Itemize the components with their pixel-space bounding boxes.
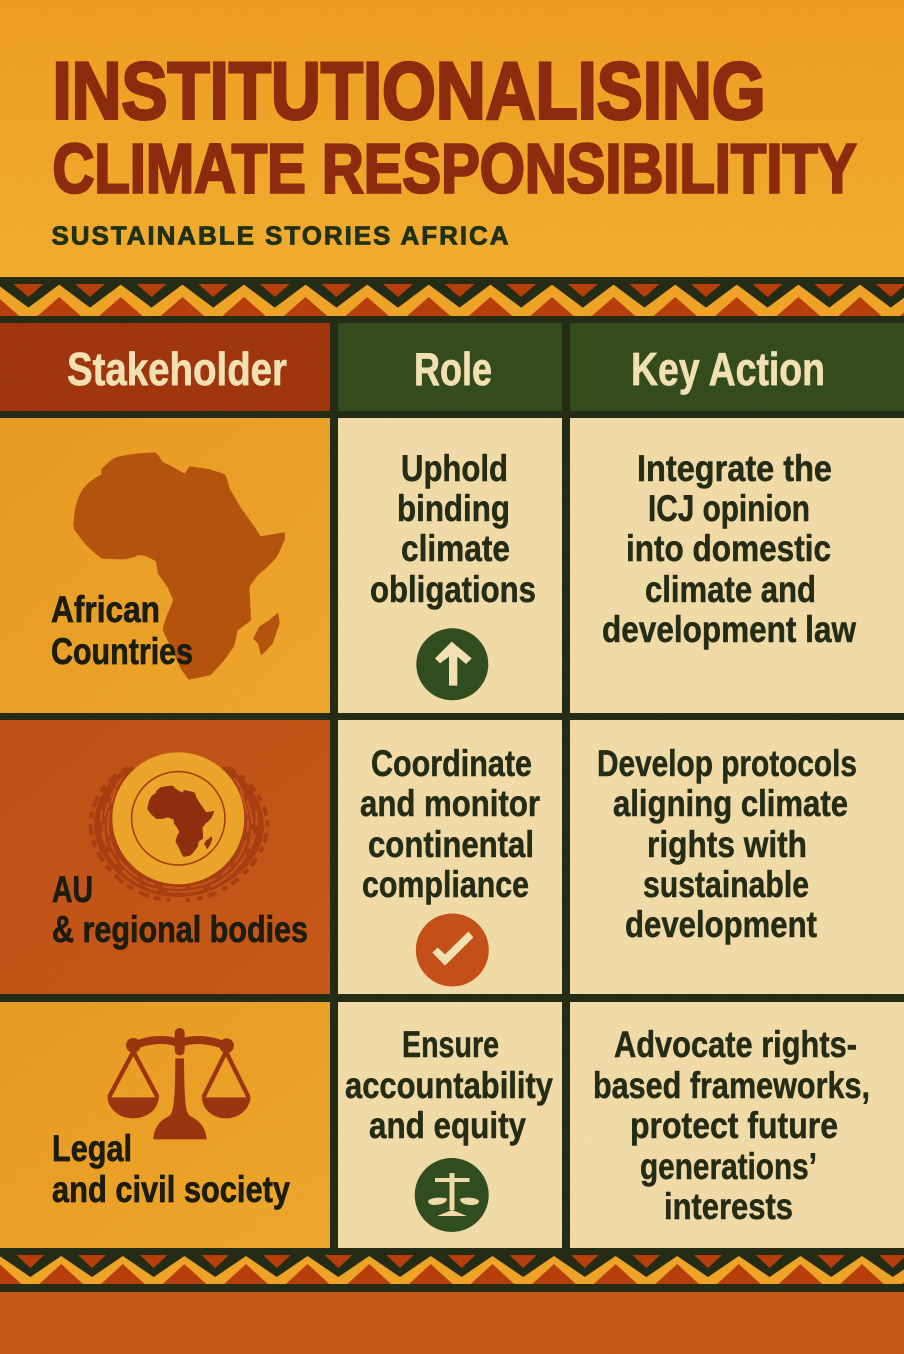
header: key action: Key Action <box>631 343 825 395</box>
label: AU and regional bodies <box>52 869 308 950</box>
panel: key action 2: development <box>625 904 817 945</box>
wreath <box>91 766 267 900</box>
title: INSTITUTIONALISING <box>52 46 766 136</box>
label: African Countries: African <box>51 589 160 630</box>
panel: key action 2: rights with <box>647 824 807 865</box>
text: role 2: compliance <box>362 864 529 905</box>
text: role 3: accountability <box>345 1065 553 1106</box>
icon: scales of justice <box>107 1028 251 1139</box>
panel: key action 3: protect future <box>630 1105 838 1146</box>
panel: key action 1: Integrate the <box>637 448 832 489</box>
label: AU and regional bodies: AU <box>52 869 93 910</box>
label: AU and regional bodies: & regional bodies <box>52 909 308 950</box>
text: role 2 <box>360 743 540 905</box>
subtitle: SUSTAINABLE STORIES AFRICA <box>52 220 512 250</box>
icon: small scales <box>415 1158 489 1232</box>
panel: role 3 <box>338 1002 562 1248</box>
text: role 2: and monitor <box>360 783 540 824</box>
panel: key action 1: into domestic <box>626 528 831 569</box>
text: role 3 <box>345 1024 553 1146</box>
title <box>52 46 856 208</box>
text: role 1 <box>370 448 536 610</box>
panel: role 1 <box>338 418 562 713</box>
panel: key action 3 <box>570 1002 904 1248</box>
header: role <box>338 323 562 411</box>
panel: African Countries stakeholder <box>0 418 330 713</box>
panel: key action 1: ICJ opinion <box>648 488 810 529</box>
label: legal and civil society: and civil society <box>52 1169 290 1210</box>
bottom zigzag border <box>0 1248 904 1292</box>
icon: map of Africa <box>74 453 284 679</box>
panel: key action 2: aligning climate <box>613 783 848 824</box>
text: role 1: binding <box>397 488 510 529</box>
table header row <box>0 323 904 411</box>
label: legal and civil society <box>52 1128 290 1210</box>
text: role 2: continental <box>368 824 534 865</box>
label: legal and civil society: Legal <box>52 1128 132 1169</box>
text: role 3: and equity <box>369 1105 526 1146</box>
header: role: Role <box>414 343 492 395</box>
top zigzag border <box>0 277 904 324</box>
icon: up arrow <box>416 628 488 700</box>
header: stakeholder <box>0 323 330 411</box>
text: role 2: Coordinate <box>371 743 532 784</box>
label: African Countries: Countries <box>51 631 193 672</box>
icon: check mark <box>416 914 489 986</box>
text: role 3: Ensure <box>402 1024 499 1065</box>
footer band <box>0 1292 904 1354</box>
label: African Countries <box>51 589 193 672</box>
panel: key action 3: Advocate rights- <box>614 1024 857 1065</box>
panel: role 2 <box>338 720 562 994</box>
panel: key action 1 <box>570 418 904 713</box>
panel: legal and civil society stakeholder <box>0 1002 330 1248</box>
header: key action <box>570 323 904 411</box>
panel: key action 2: sustainable <box>643 864 809 905</box>
icon: AU emblem <box>91 752 267 900</box>
text: role 1: obligations <box>370 569 536 610</box>
text: role 1: climate <box>401 528 510 569</box>
panel: key action 3: interests <box>664 1186 793 1227</box>
text: role 1: Uphold <box>401 448 508 489</box>
header area <box>0 0 904 277</box>
panel: key action 1: development law <box>602 609 856 650</box>
header: stakeholder: Stakeholder <box>67 343 287 395</box>
panel: key action 2 <box>570 720 904 994</box>
small Africa map <box>147 786 214 857</box>
panel: key action 3: generations’ <box>640 1146 817 1187</box>
panel: AU and regional bodies stakeholder <box>0 720 330 994</box>
panel: key action 1: climate and <box>645 569 816 610</box>
